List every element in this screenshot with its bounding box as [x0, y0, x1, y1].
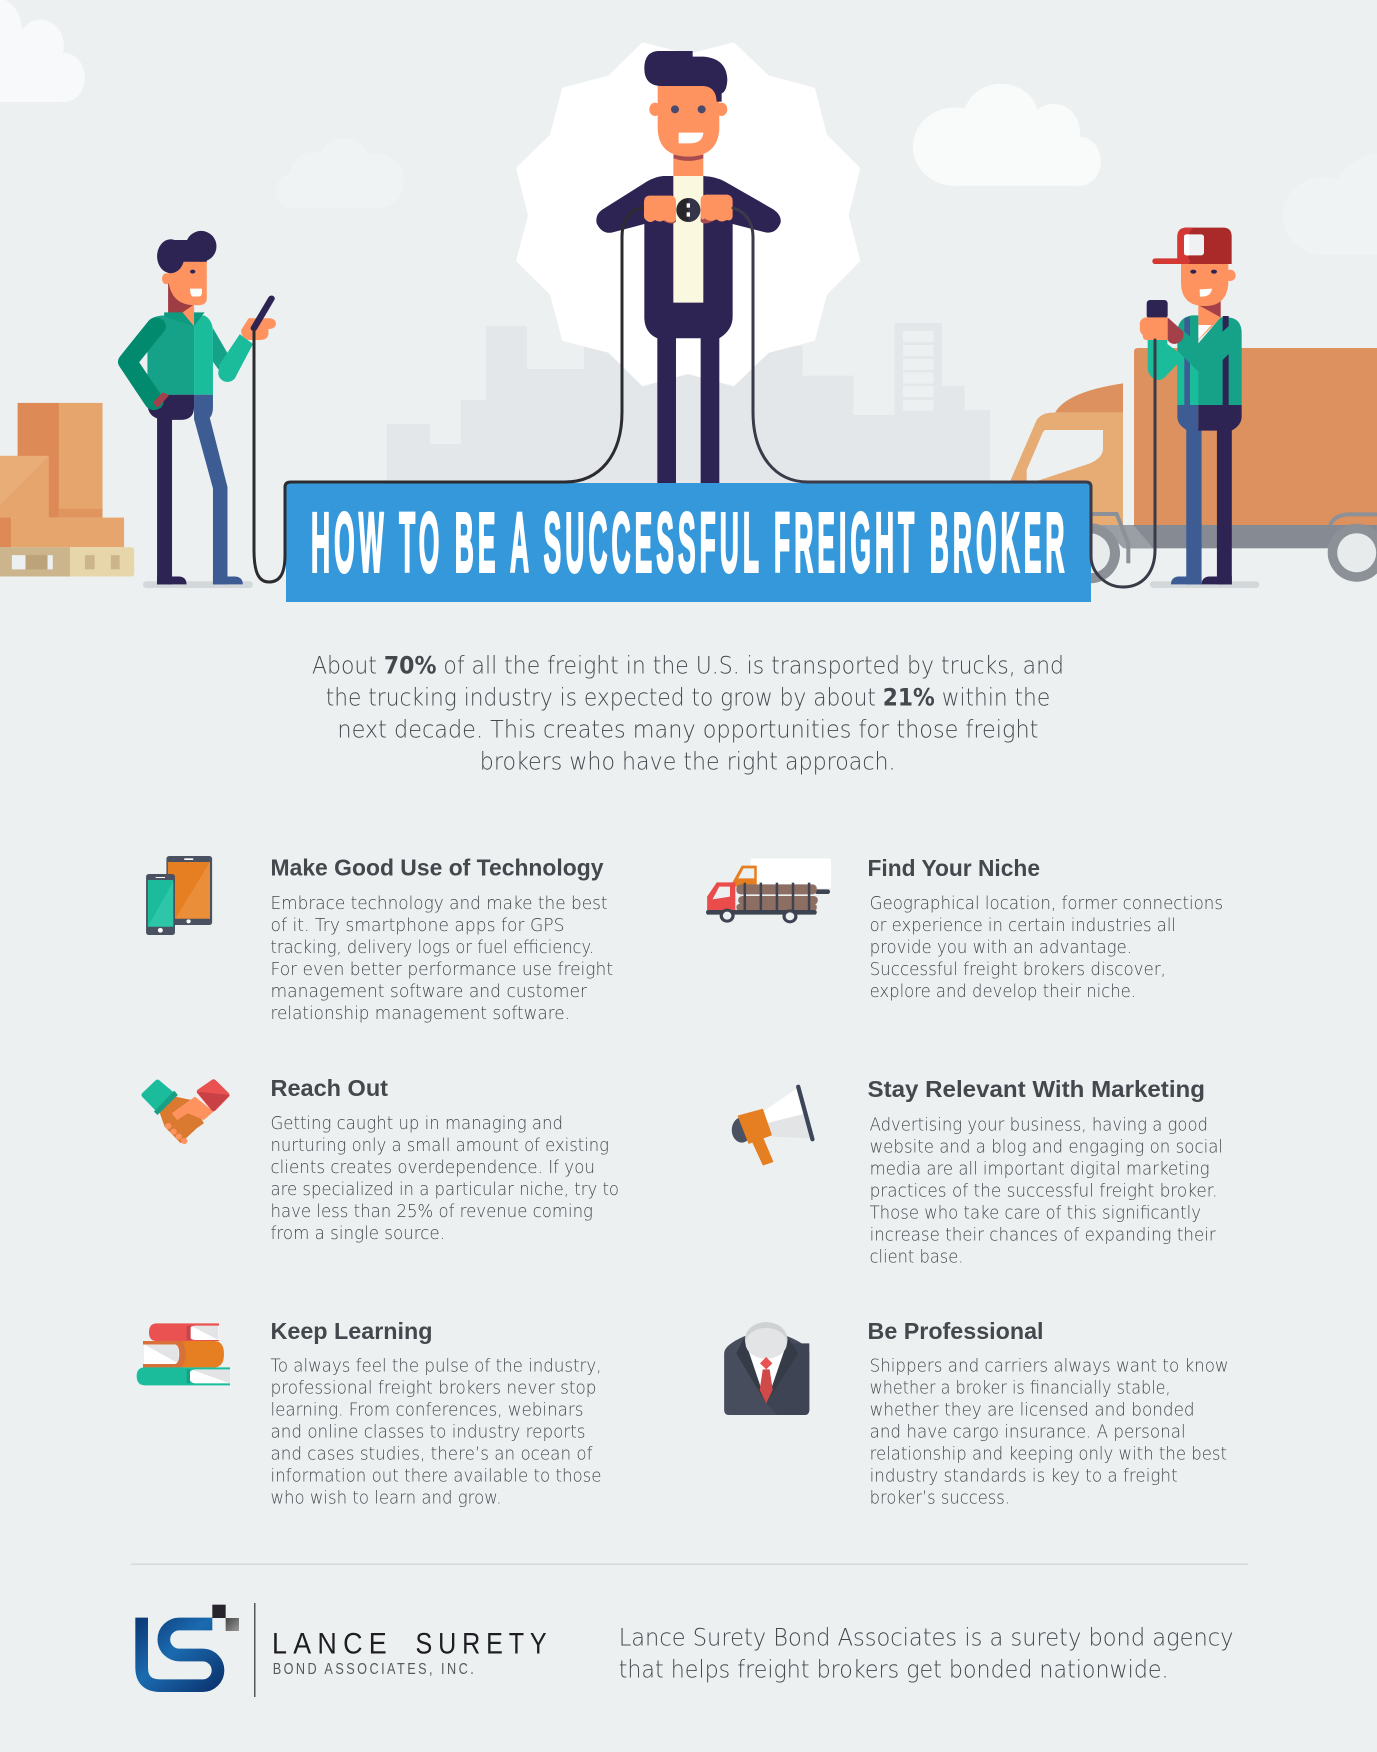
- footer tagline: that helps freight brokers get bonded nationwide.: [619, 1656, 1169, 1684]
- broker hair: [644, 51, 727, 102]
- body text: provide you with an advantage.: [870, 937, 1132, 958]
- title banner: [286, 483, 1091, 602]
- footer tagline: Lance Surety Bond Associates is a surety bond agency: [619, 1624, 1234, 1652]
- body text: nurturing only a small amount of existing: [270, 1135, 609, 1156]
- driver torso and head: [1140, 228, 1242, 431]
- logo wordmark: BOND ASSOCIATES, INC.: [273, 1661, 476, 1678]
- body text: increase their chances of expanding their: [870, 1224, 1216, 1245]
- city skyline: [387, 323, 990, 483]
- plug connecting two cords: [676, 198, 700, 222]
- logo wordmark: LANCE: [272, 1627, 393, 1660]
- body text: [870, 1114, 1223, 1267]
- cloud: top left: [0, 0, 85, 102]
- white starburst behind broker: [516, 42, 860, 386]
- cloud: right center: [913, 84, 1101, 186]
- body text: and have cargo insurance. A personal: [870, 1422, 1186, 1443]
- body text: website and a blog and engaging on social: [870, 1136, 1223, 1157]
- icon: suit: [724, 1322, 809, 1415]
- body text: Those who take care of this significantly: [870, 1202, 1201, 1223]
- logo divider: [254, 1603, 256, 1697]
- broker face: [649, 83, 727, 157]
- body text: media are all important digital marketing: [870, 1158, 1210, 1179]
- body text: To always feel the pulse of the industry,: [270, 1356, 602, 1377]
- heading: Reach Out: [270, 1075, 388, 1101]
- body text: have less than 25% of revenue coming: [270, 1201, 593, 1222]
- body text: and online classes to industry reports: [270, 1422, 586, 1443]
- body text: or experience in certain industries all: [870, 915, 1176, 936]
- logo wordmark: SURETY: [416, 1627, 552, 1660]
- body text: information out there available to those: [270, 1466, 602, 1487]
- panel: reach out: [144, 1075, 619, 1244]
- body text: industry standards is key to a freight: [870, 1466, 1178, 1487]
- stacked boxes on pallet: [0, 403, 134, 576]
- heading: Make Good Use of Technology: [270, 855, 604, 881]
- panel: keep learning: [137, 1318, 602, 1509]
- intro paragraph: brokers who have the right approach.: [480, 747, 896, 775]
- body text: learning. From conferences, webinars: [270, 1400, 584, 1421]
- footer tagline: [619, 1624, 1234, 1684]
- truck: rear wheel: [1328, 524, 1377, 582]
- character: man with phone, left: [128, 231, 276, 588]
- body text: Shippers and carriers always want to know: [870, 1356, 1229, 1377]
- character: truck driver, right: [1140, 228, 1259, 588]
- body text: whether a broker is financially stable,: [870, 1378, 1171, 1399]
- icon: megaphone: [732, 1087, 812, 1165]
- truck: front wheel: [1060, 523, 1120, 583]
- icon: handshake: [144, 1082, 230, 1144]
- body text: [270, 1113, 619, 1244]
- body text: of it. Try smartphone apps for GPS: [270, 915, 564, 936]
- body text: practices of the successful freight broker.: [870, 1180, 1218, 1201]
- body text: [870, 893, 1223, 1002]
- body text: [870, 1356, 1229, 1509]
- panel: be professional: [724, 1318, 1229, 1509]
- truck: cab: [1011, 383, 1377, 563]
- broker shirt: [673, 176, 703, 303]
- body text: relationship and keeping only with the best: [870, 1444, 1227, 1465]
- heading: Find Your Niche: [868, 855, 1040, 881]
- logo wordmark: [272, 1627, 552, 1678]
- body text: [270, 1356, 602, 1509]
- heading: Stay Relevant With Marketing: [868, 1076, 1205, 1102]
- body text: Successful freight brokers discover,: [870, 959, 1166, 980]
- icon: phone and tablet: [146, 856, 212, 935]
- body text: management software and customer: [270, 981, 588, 1002]
- body text: clients creates overdependence. If you: [270, 1157, 595, 1178]
- broker neck: [673, 153, 703, 176]
- body text: Advertising your business, having a good: [870, 1114, 1208, 1135]
- body text: relationship management software.: [270, 1003, 570, 1024]
- panel: find your niche: [706, 855, 1223, 1002]
- body text: and cases studies, there’s an ocean of: [270, 1444, 593, 1465]
- cloud: far right: [1283, 153, 1377, 255]
- body text: from a single source.: [270, 1223, 445, 1244]
- icon: trucks: [706, 858, 831, 923]
- body text: professional freight brokers never stop: [270, 1378, 596, 1399]
- body text: broker’s success.: [870, 1488, 1010, 1509]
- truck: cargo box: [1134, 348, 1377, 525]
- delivery truck: [1011, 348, 1377, 583]
- cord: broker to truck driver: [733, 208, 1155, 587]
- body text: who wish to learn and grow.: [270, 1488, 502, 1509]
- intro paragraph: About 70% of all the freight in the U.S. is transported by trucks, and: [312, 651, 1064, 679]
- intro paragraph: the trucking industry is expected to grow by about 21% within the: [326, 683, 1050, 711]
- driver shadow and legs: [1150, 427, 1259, 588]
- body text: For even better performance use freight: [270, 959, 613, 980]
- icon: books: [137, 1323, 230, 1385]
- intro paragraph: [312, 651, 1064, 775]
- footer logo: [142, 1603, 553, 1697]
- intro paragraph: next decade. This creates many opportunities for those freight: [337, 715, 1038, 743]
- body text: Getting caught up in managing and: [270, 1113, 563, 1134]
- body text: explore and develop their niche.: [870, 981, 1136, 1002]
- character: central broker: [596, 51, 781, 483]
- body text: Embrace technology and make the best: [270, 893, 608, 914]
- heading: Be Professional: [868, 1318, 1044, 1344]
- body text: tracking, delivery logs or fuel efficiency.: [270, 937, 594, 958]
- panel: stay relevant with marketing: [732, 1076, 1223, 1267]
- body text: client base.: [870, 1246, 964, 1267]
- heading: Keep Learning: [270, 1318, 432, 1344]
- logo mark: [142, 1605, 239, 1686]
- broker hands: [644, 195, 733, 223]
- body text: whether they are licensed and bonded: [870, 1400, 1195, 1421]
- body text: are specialized in a particular niche, try to: [270, 1179, 619, 1200]
- broker jacket: [596, 176, 781, 338]
- body text: Geographical location, former connections: [870, 893, 1223, 914]
- broker legs: [657, 323, 719, 483]
- cloud: left center: [276, 138, 404, 208]
- cord: left man to broker: [254, 208, 642, 582]
- body text: [270, 893, 613, 1024]
- panel: make good use of technology: [146, 855, 613, 1024]
